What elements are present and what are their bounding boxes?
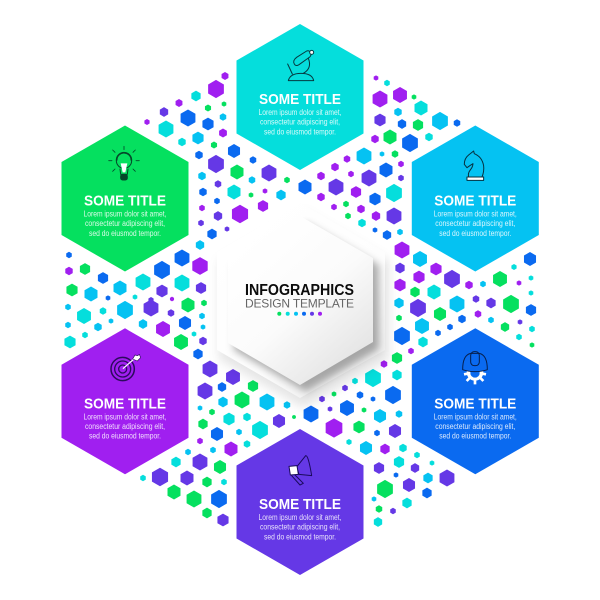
description: consectetur adipiscing elit, (85, 219, 165, 228)
description: sed do eiusmod tempor. (89, 432, 161, 441)
panel: lower left purple (62, 328, 188, 474)
description: sed do eiusmod tempor. (89, 229, 161, 238)
description: sed do eiusmod tempor. (439, 432, 511, 441)
description (84, 412, 166, 441)
description (258, 108, 342, 136)
description: Lorem ipsum dolor sit amet, (258, 513, 342, 522)
description: consectetur adipiscing elit, (435, 422, 515, 431)
description: Lorem ipsum dolor sit amet, (84, 412, 166, 421)
icon: megaphone (289, 456, 312, 485)
description: consectetur adipiscing elit, (260, 118, 340, 127)
description: Lorem ipsum dolor sit amet, (84, 210, 166, 219)
description (434, 210, 517, 238)
description (434, 412, 517, 441)
description: Lorem ipsum dolor sit amet, (258, 108, 342, 117)
panel: top teal (236, 24, 364, 170)
panel: upper left green (62, 126, 188, 272)
description: consectetur adipiscing elit, (260, 523, 340, 532)
central layered hexagon (217, 203, 389, 408)
description: Lorem ipsum dolor sit amet, (434, 412, 517, 421)
description: sed do eiusmod tempor. (264, 127, 336, 136)
description (84, 210, 166, 238)
description: Lorem ipsum dolor sit amet, (434, 210, 517, 219)
icon: target with dart (111, 354, 141, 381)
subheading: DESIGN TEMPLATE (245, 296, 354, 310)
colored dots row (277, 312, 322, 316)
description: sed do eiusmod tempor. (264, 532, 336, 541)
icon: helmet and gear (463, 352, 487, 384)
description: consectetur adipiscing elit, (85, 422, 165, 431)
heading: INFOGRAPHICS (245, 282, 354, 299)
title: SOME TITLE (434, 194, 517, 210)
title: SOME TITLE (259, 92, 341, 108)
icon: microscope (288, 50, 314, 81)
icon: chess knight (464, 151, 484, 180)
panel: lower right blue (412, 328, 539, 474)
icon: light bulb (109, 146, 139, 180)
title: SOME TITLE (84, 194, 166, 210)
title: SOME TITLE (259, 497, 341, 513)
hexagon dot field (64, 72, 536, 527)
description: sed do eiusmod tempor. (439, 229, 511, 238)
panel: upper right light blue (412, 126, 539, 272)
title: SOME TITLE (84, 396, 166, 412)
description (258, 513, 342, 541)
panel: bottom violet (236, 429, 364, 575)
description: consectetur adipiscing elit, (435, 219, 515, 228)
title: SOME TITLE (434, 396, 517, 412)
